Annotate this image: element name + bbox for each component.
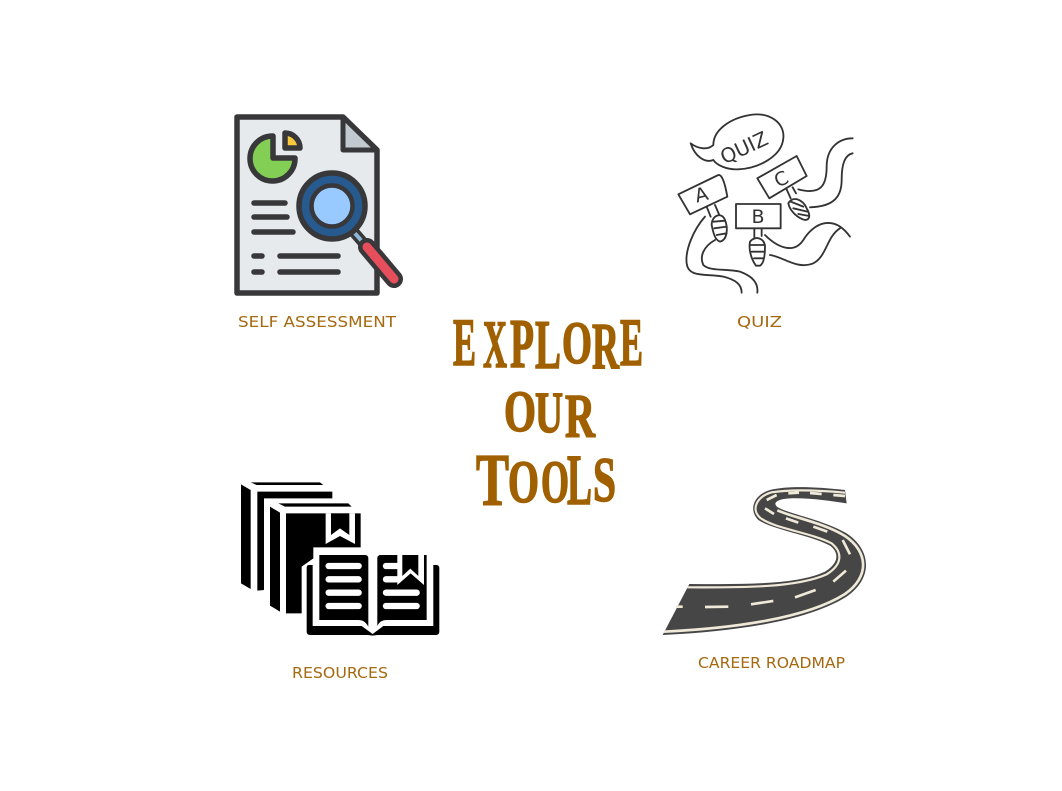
closed book one bbox=[241, 482, 332, 591]
icon: stack of books with open book bbox=[241, 482, 439, 636]
title: explore our tools: T bbox=[476, 440, 509, 522]
label: quiz: QUIZ bbox=[737, 313, 782, 331]
title: explore our tools bbox=[453, 304, 643, 522]
title: explore our tools: L bbox=[567, 440, 592, 520]
open book bbox=[307, 565, 439, 636]
title: explore our tools: O bbox=[562, 310, 592, 376]
title: explore our tools: E bbox=[453, 304, 476, 380]
title: explore our tools: O bbox=[508, 449, 539, 515]
icon: document with magnifying glass bbox=[237, 117, 394, 293]
sign A bbox=[678, 175, 727, 214]
label: self assessment: SELF ASSESSMENT bbox=[238, 313, 397, 331]
title: explore our tools: S bbox=[593, 444, 616, 515]
quiz sign letters: QUIZ bbox=[716, 126, 772, 169]
title: explore our tools: O bbox=[541, 449, 569, 515]
speech bubble bbox=[691, 114, 783, 169]
title: explore our tools: R bbox=[565, 383, 596, 451]
title: explore our tools: U bbox=[535, 380, 563, 445]
title: explore our tools: O bbox=[504, 379, 536, 444]
title: explore our tools: L bbox=[535, 307, 561, 384]
sign B bbox=[736, 204, 781, 228]
quiz sign letters: C bbox=[771, 167, 792, 192]
title: explore our tools: R bbox=[592, 310, 620, 383]
closed book two bbox=[270, 503, 361, 613]
fists bbox=[712, 215, 727, 242]
quiz sign letters: B bbox=[751, 206, 765, 228]
title: explore our tools: X bbox=[483, 306, 507, 382]
icon: quiz hands holding answer signs bbox=[678, 114, 853, 293]
quiz sign letters: A bbox=[692, 183, 711, 208]
arms and handles bbox=[707, 187, 796, 237]
sign C bbox=[757, 156, 807, 198]
quiz sign letters bbox=[692, 126, 792, 228]
title: explore our tools: E bbox=[620, 304, 643, 380]
title: explore our tools: P bbox=[510, 306, 534, 383]
label: career roadmap: CAREER ROADMAP bbox=[698, 654, 845, 672]
icon: winding road bbox=[663, 487, 866, 635]
label: resources: RESOURCES bbox=[292, 664, 388, 682]
